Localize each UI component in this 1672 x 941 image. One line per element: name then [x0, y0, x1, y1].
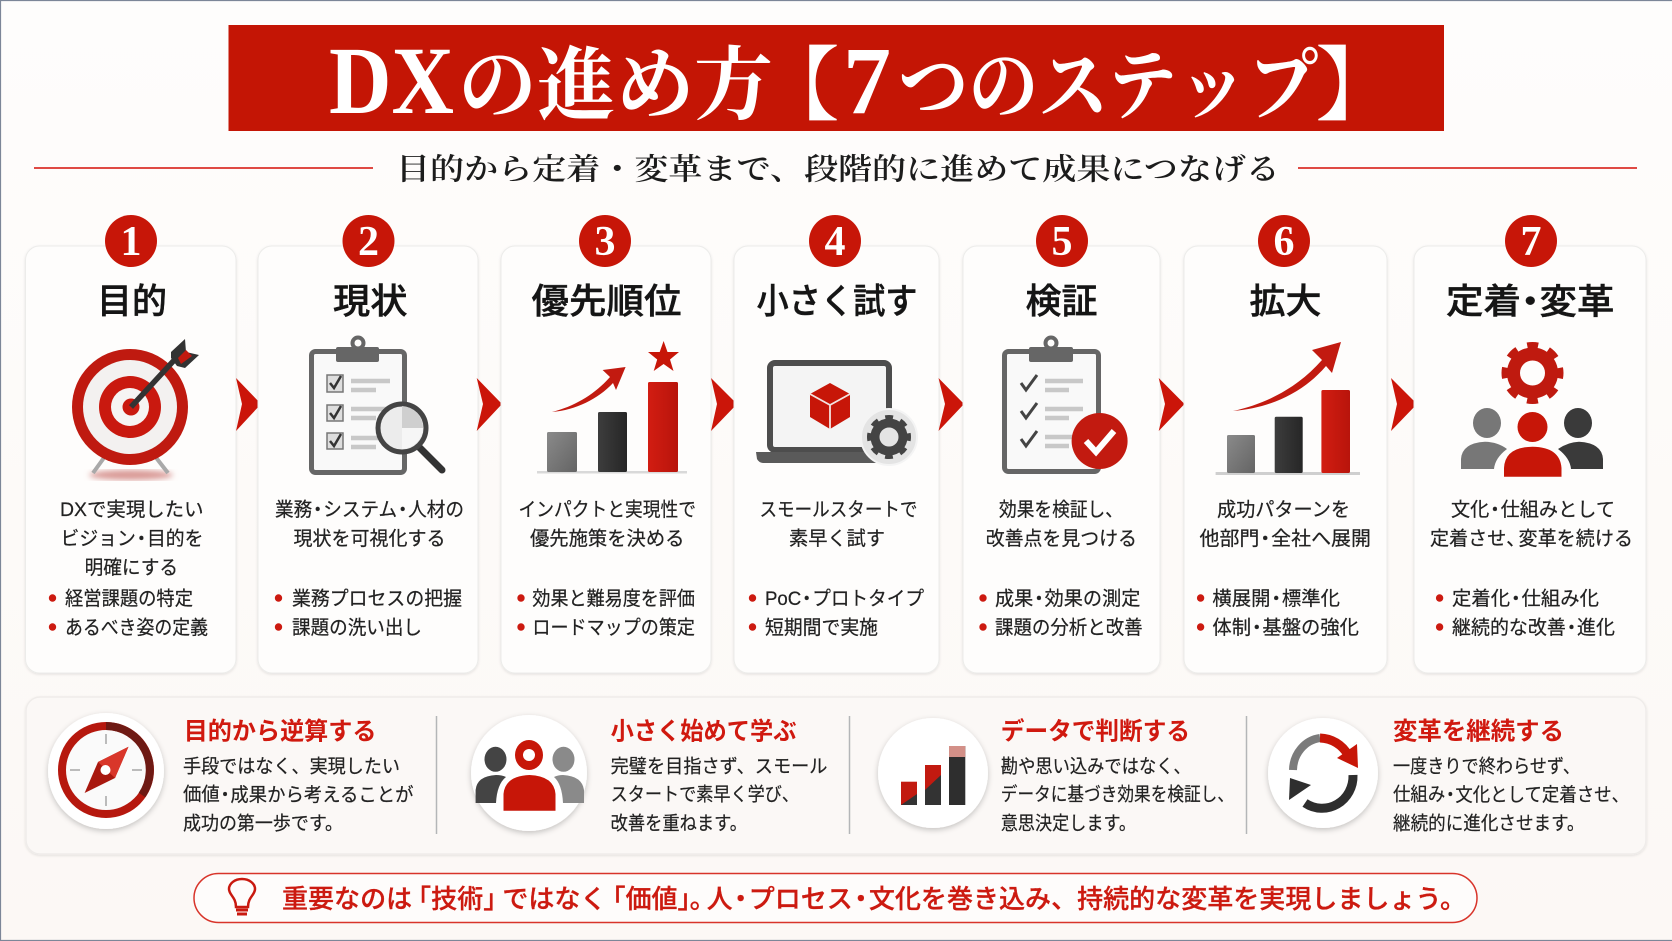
heading 拡大: 拡大	[1250, 282, 1322, 322]
panel: step 5	[963, 215, 1160, 673]
body text: 価値・成果から考えることが	[183, 784, 414, 806]
icon: rising bars with star	[537, 341, 687, 474]
bullets: 業務プロセスの把握	[292, 588, 462, 610]
description: 成功パターンを	[1217, 499, 1350, 521]
panel: step 4	[734, 215, 939, 673]
title banner: 【	[759, 43, 839, 131]
title banner: 】	[1316, 43, 1396, 131]
body text: 一度きりで終わらせず、	[1393, 756, 1580, 778]
description: 他部門・全社へ展開	[1200, 528, 1371, 550]
bullets: 経営課題の特定	[65, 588, 193, 610]
step number 7: 7	[1520, 219, 1542, 265]
panel: step 1	[26, 215, 236, 673]
step number 3	[579, 215, 631, 267]
description: 明確にする	[85, 557, 178, 579]
description: ビジョン・目的を	[60, 528, 204, 550]
step number 7	[1505, 215, 1557, 267]
bullets: あるべき姿の定義	[65, 617, 208, 639]
heading 定着・変革: 定着・変革	[1446, 282, 1614, 322]
description: 現状を可視化する	[294, 528, 446, 550]
arrow 1	[236, 378, 261, 431]
body text: 完璧を目指さず、スモール	[611, 756, 828, 778]
icon: growth bars with arrow	[1216, 342, 1360, 475]
icon: team	[471, 715, 587, 831]
heading 検証: 検証	[1026, 282, 1098, 322]
step number 4	[809, 215, 861, 267]
bullets: 成果・効果の測定	[995, 588, 1140, 610]
bullets: 体制・基盤の強化	[1212, 617, 1359, 639]
key point 3	[878, 716, 1234, 834]
body text: データに基づき効果を検証し、	[1001, 784, 1234, 806]
description: 業務・システム・人材の	[275, 499, 464, 521]
body text: 改善を重ねます。	[611, 812, 747, 834]
title banner: の進め方	[458, 43, 773, 131]
heading 現状: 現状	[333, 282, 408, 322]
subtitle with rules: 目的から定着・変革まで、段階的に進めて成果につなげる	[396, 154, 1280, 186]
description: スモールスタートで	[760, 499, 918, 521]
step number 6	[1258, 215, 1310, 267]
step number 5	[1036, 215, 1088, 267]
description	[60, 499, 204, 579]
icon: data bars	[878, 718, 988, 828]
callout text: 重要なのは「技術」ではなく「価値」。人・プロセス・文化を巻き込み、持続的な変革を実現しましょう。	[282, 884, 1466, 914]
panel: step 7	[1414, 215, 1646, 673]
key point 1	[48, 713, 414, 834]
body text: 成功の第一歩です。	[183, 812, 343, 834]
panel: step 6	[1184, 215, 1387, 673]
body text	[611, 756, 828, 834]
bullets: PoC・プロトタイプ	[765, 588, 924, 610]
panel: key points	[26, 697, 1646, 854]
heading 目的: 目的	[97, 282, 167, 322]
title banner: 7	[843, 27, 891, 134]
bullets	[749, 588, 924, 639]
description: インパクトと実現性で	[518, 499, 696, 521]
step number 6: 6	[1274, 219, 1294, 265]
icon: compass	[48, 713, 164, 829]
body text: スタートで素早く学び、	[611, 784, 799, 806]
bullets: 課題の分析と改善	[995, 617, 1143, 639]
description: 優先施策を決める	[530, 528, 684, 550]
bullets: 定着化・仕組み化	[1452, 588, 1599, 610]
icon: clipboard and magnifier	[312, 338, 442, 472]
body text: 手段ではなく、実現したい	[183, 756, 400, 778]
description: 定着させ、変革を続ける	[1430, 528, 1633, 550]
heading: データで判断する	[1001, 716, 1190, 746]
body text: 継続的に進化させます。	[1393, 812, 1584, 834]
body text	[1001, 756, 1234, 834]
arrow 2	[477, 378, 502, 431]
step number 5: 5	[1052, 219, 1072, 265]
heading 小さく試す: 小さく試す	[756, 282, 918, 322]
bullets: 継続的な改善・進化	[1452, 617, 1615, 639]
bullets	[49, 588, 208, 639]
step number 3: 3	[594, 219, 616, 265]
bullets	[1197, 588, 1359, 639]
bullets: ロードマップの策定	[532, 617, 695, 639]
body text	[183, 756, 414, 834]
icon: gear and people	[1461, 346, 1603, 477]
title banner: DX	[329, 27, 454, 134]
bullets: 効果と難易度を評価	[532, 588, 695, 610]
heading: 小さく始めて学ぶ	[611, 718, 796, 746]
panel: step 3	[501, 215, 711, 673]
callout	[194, 874, 1477, 922]
body text: 勘や思い込みではなく、	[1001, 756, 1191, 778]
bullets	[517, 588, 695, 639]
bullets	[979, 588, 1143, 639]
icon: laptop with cube and gear	[756, 363, 917, 465]
heading: 目的から逆算する	[184, 718, 376, 746]
description: DXで実現したい	[60, 499, 204, 521]
arrow 6	[1391, 378, 1417, 431]
bullets: 横展開・標準化	[1212, 588, 1340, 610]
body text: 意思決定します。	[1001, 812, 1136, 834]
arrow 5	[1159, 378, 1184, 431]
panel: step 2	[258, 215, 478, 673]
title banner	[228, 25, 1444, 134]
step number 2: 2	[358, 219, 379, 265]
description	[760, 499, 918, 550]
description	[1200, 499, 1371, 550]
description: 改善点を見つける	[986, 528, 1137, 550]
key point 2	[471, 715, 828, 834]
icon: clipboard with check badge	[1004, 338, 1128, 472]
description: 効果を検証し、	[999, 499, 1123, 521]
title banner: つのステップ	[898, 43, 1318, 130]
description	[986, 499, 1137, 550]
icon: target with arrow	[72, 339, 199, 480]
description: 素早く試す	[789, 528, 885, 550]
bullets: 短期間で実施	[765, 617, 878, 639]
body text	[1393, 756, 1629, 834]
icon: cycle arrows	[1268, 718, 1378, 828]
heading 優先順位: 優先順位	[532, 282, 682, 322]
step number 2	[342, 215, 394, 267]
arrow 4	[938, 378, 964, 431]
body text: 仕組み・文化として定着させ、	[1393, 784, 1629, 806]
bullets	[275, 588, 462, 639]
bullets	[1436, 588, 1615, 639]
arrow 3	[711, 378, 737, 431]
bullets: 課題の洗い出し	[292, 617, 422, 639]
description	[275, 499, 464, 550]
step number 4: 4	[824, 219, 846, 265]
icon: light bulb	[229, 879, 255, 914]
step number 1: 1	[120, 219, 142, 265]
key point 4	[1268, 718, 1629, 834]
description	[1430, 499, 1633, 550]
heading: 変革を継続する	[1393, 718, 1564, 746]
description	[518, 499, 696, 550]
step number 1	[105, 215, 157, 267]
description: 文化・仕組みとして	[1451, 499, 1615, 521]
